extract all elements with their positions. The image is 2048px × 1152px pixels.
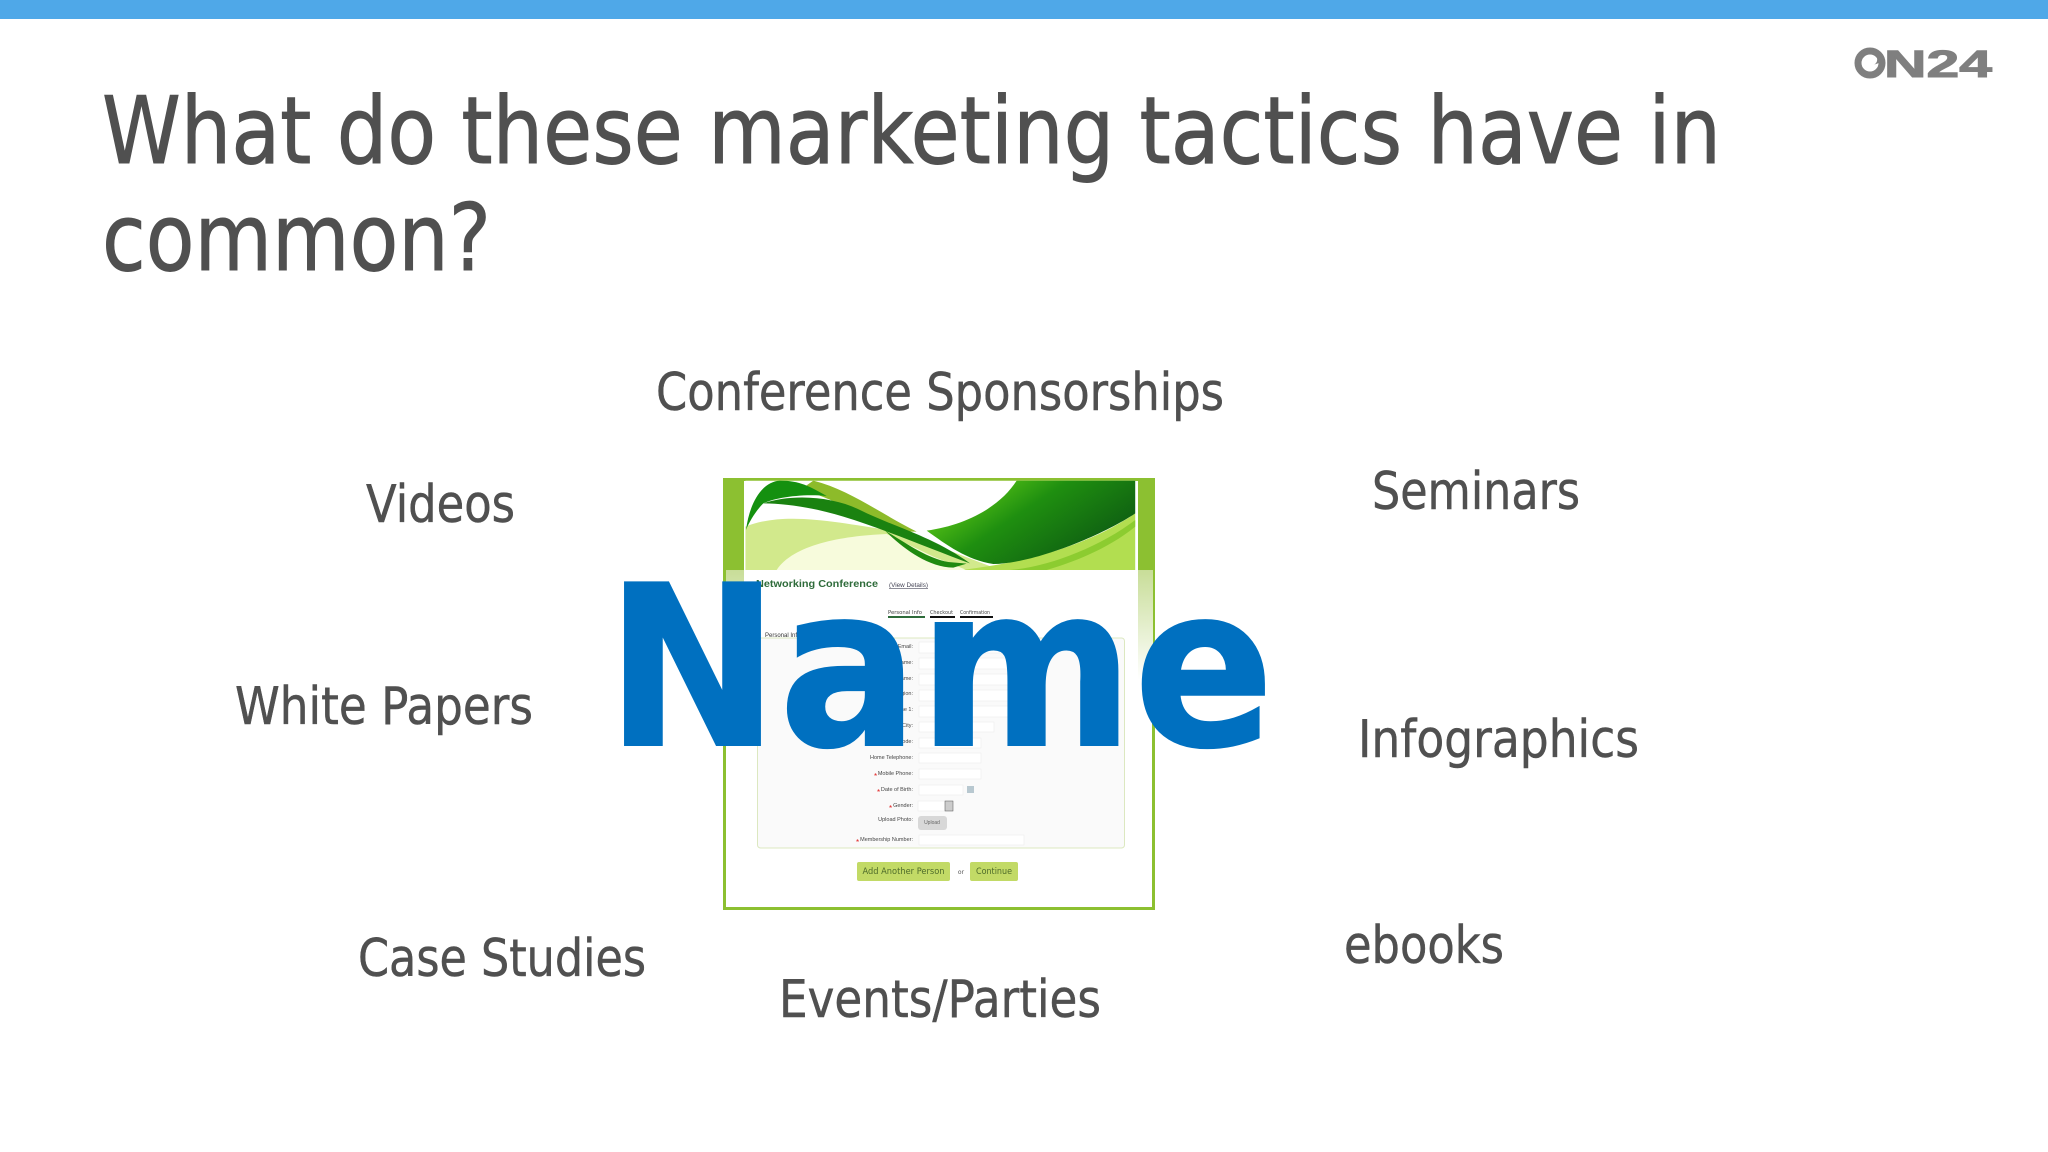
label: Case Studies: Case Studies: [358, 929, 646, 989]
form panel: *: [877, 788, 880, 797]
buttons: [857, 862, 1018, 881]
form panel: *: [856, 838, 859, 847]
title: common?: [102, 184, 491, 292]
registration form screenshot: [724, 480, 1154, 908]
event heading: Networking Conference: [756, 578, 878, 590]
form panel: Mobile Phone:: [878, 771, 913, 777]
form panel: Country/Region:: [873, 691, 913, 697]
step tabs: Personal Info: [888, 610, 923, 616]
side bands: [726, 481, 1153, 680]
form panel: Code:: [898, 739, 913, 745]
title: What do these marketing tactics have in: [102, 77, 1721, 185]
buttons: Add Another Person: [862, 867, 944, 877]
step tabs: Confirmation: [960, 610, 990, 616]
form panel: *: [874, 772, 877, 781]
title: [102, 77, 1721, 292]
form panel: Date of Birth:: [881, 787, 913, 793]
label: White Papers: White Papers: [235, 677, 533, 737]
label: Videos: Videos: [366, 475, 515, 535]
step tabs: Checkout: [930, 610, 954, 616]
logo: ON24: N24: [1884, 44, 1992, 86]
buttons: or: [958, 869, 965, 876]
logo: ON24: [1858, 44, 1992, 86]
form panel: Line 1:: [896, 707, 913, 713]
label: ebooks: ebooks: [1344, 916, 1504, 976]
label: Events/Parties: Events/Parties: [779, 970, 1101, 1030]
form panel: [758, 633, 1124, 848]
form panel: City:: [902, 723, 913, 729]
form panel: Membership Number:: [860, 837, 913, 843]
step tabs: [888, 610, 993, 618]
form panel: Email:: [898, 644, 913, 650]
form panel: *: [889, 804, 892, 813]
form panel: Upload: [924, 820, 940, 826]
event heading: [756, 578, 928, 590]
form panel: Name:: [897, 660, 913, 666]
form panel: Personal Info: [765, 633, 801, 639]
form panel: Upload Photo:: [878, 817, 913, 823]
form panel: Name:: [897, 676, 913, 682]
big word: Name: Name: [606, 538, 1274, 798]
buttons: Continue: [976, 867, 1012, 877]
banner: green waves: [745, 481, 1135, 570]
event heading: (View Details): [889, 583, 928, 589]
form panel: Home Telephone:: [870, 755, 913, 761]
label: Seminars: Seminars: [1372, 462, 1580, 522]
label: Infographics: Infographics: [1358, 710, 1639, 770]
form panel: Gender:: [893, 803, 913, 809]
top bar: [0, 0, 2048, 19]
label: Conference Sponsorships: Conference Sponsorships: [656, 363, 1224, 423]
